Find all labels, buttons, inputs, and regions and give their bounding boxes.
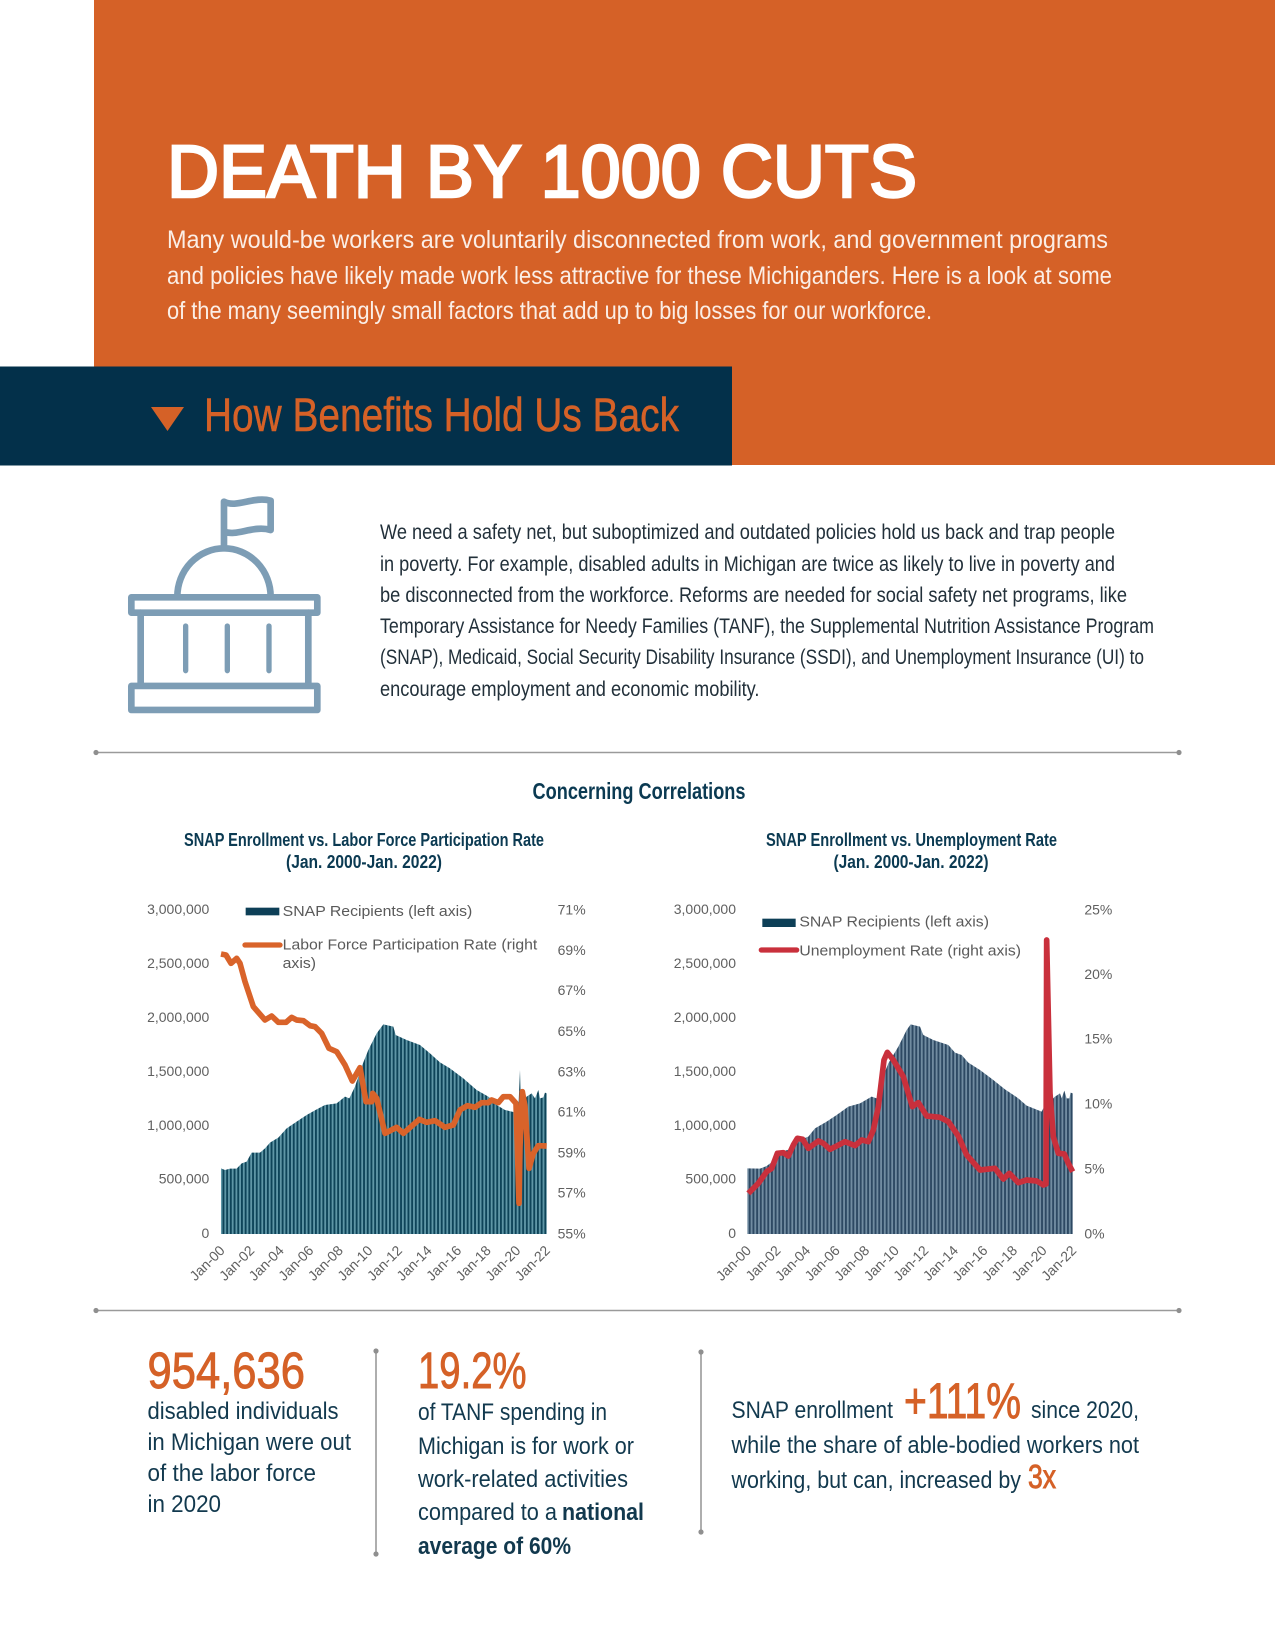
left axis labels bbox=[147, 901, 210, 1241]
stat text: of TANF spending in bbox=[418, 1399, 607, 1426]
chart title: left: SNAP Enrollment vs. Labor Force Participation Rate bbox=[184, 829, 544, 850]
section heading band bbox=[0, 366, 732, 466]
header intro text: Many would-be workers are voluntarily disconnected from work, and government programs bbox=[167, 226, 1108, 254]
intro paragraph: be disconnected from the workforce. Reforms are needed for social safety net programs, like bbox=[380, 584, 1127, 607]
x axis labels: Jan-18 bbox=[979, 1242, 1020, 1284]
right axis labels: 5% bbox=[1084, 1160, 1105, 1176]
right axis labels: 0% bbox=[1084, 1225, 1105, 1241]
x axis labels: Jan-02 bbox=[216, 1242, 258, 1284]
intro paragraph bbox=[380, 521, 1154, 701]
stat text: average of 60% bbox=[418, 1533, 571, 1560]
stat text: Michigan is for work or bbox=[418, 1433, 634, 1460]
bars: SNAP recipients bbox=[747, 1024, 1073, 1234]
stat: SNAP enrollment: since 2020, bbox=[1031, 1397, 1139, 1424]
chart title: right bbox=[766, 829, 1057, 872]
x axis labels: Jan-06 bbox=[275, 1242, 317, 1284]
stat: SNAP enrollment: while the share of able-bodied workers not bbox=[731, 1432, 1139, 1459]
right axis labels: 69% bbox=[558, 942, 586, 958]
x axis labels: Jan-10 bbox=[860, 1242, 902, 1284]
legend: SNAP Recipients (left axis) bbox=[283, 903, 472, 920]
stat number: 3x: 3x bbox=[1028, 1458, 1056, 1495]
stat number: +111%: +111% bbox=[904, 1373, 1021, 1429]
x axis labels: Jan-10 bbox=[334, 1242, 376, 1284]
x axis labels: Jan-02 bbox=[742, 1242, 784, 1284]
stat text: in Michigan were out bbox=[148, 1429, 351, 1456]
right axis labels: 25% bbox=[1084, 901, 1112, 917]
bars: SNAP recipients bbox=[221, 1024, 547, 1234]
right axis labels: 57% bbox=[558, 1185, 586, 1201]
left axis labels: 2,000,000 bbox=[147, 1009, 210, 1025]
title: DEATH BY 1000 CUTS bbox=[167, 130, 917, 213]
legend: axis) bbox=[283, 955, 316, 972]
legend bbox=[245, 903, 538, 972]
legend: Labor Force Participation Rate (right bbox=[283, 936, 538, 953]
stat text bbox=[417, 1399, 644, 1560]
x axis labels bbox=[713, 1242, 1080, 1284]
stat: SNAP enrollment: SNAP enrollment bbox=[732, 1397, 893, 1424]
left axis labels: 1,000,000 bbox=[674, 1117, 736, 1133]
right axis labels: 65% bbox=[558, 1023, 586, 1039]
x axis labels: Jan-22 bbox=[511, 1242, 553, 1284]
left axis labels: 1,500,000 bbox=[674, 1063, 736, 1079]
legend bbox=[761, 914, 1021, 959]
x axis labels: Jan-22 bbox=[1038, 1242, 1080, 1284]
right axis labels: 63% bbox=[558, 1064, 586, 1080]
x axis labels: Jan-14 bbox=[393, 1242, 435, 1284]
left axis labels: 0 bbox=[728, 1225, 736, 1241]
charts heading: Concerning Correlations bbox=[532, 778, 746, 804]
header intro text: and policies have likely made work less attractive for these Michiganders. Here is a look at some bbox=[167, 262, 1112, 290]
left axis labels: 1,000,000 bbox=[147, 1117, 210, 1133]
left axis labels: 500,000 bbox=[685, 1171, 736, 1187]
header: orange banner bbox=[94, 0, 1275, 465]
right axis labels: 61% bbox=[558, 1104, 586, 1120]
right axis labels: 59% bbox=[558, 1144, 586, 1160]
left axis labels: 2,000,000 bbox=[674, 1009, 736, 1025]
x axis labels: Jan-04 bbox=[772, 1242, 813, 1284]
x axis labels: Jan-00 bbox=[713, 1242, 754, 1284]
right axis labels: 10% bbox=[1084, 1096, 1112, 1112]
chart title: right: (Jan. 2000-Jan. 2022) bbox=[834, 851, 988, 872]
left axis labels: 2,500,000 bbox=[674, 955, 736, 971]
stat: SNAP enrollment: working, but can, increased by bbox=[731, 1467, 1021, 1494]
x axis labels: Jan-00 bbox=[186, 1242, 228, 1284]
left axis labels: 500,000 bbox=[159, 1171, 210, 1187]
left axis labels bbox=[674, 901, 736, 1241]
icon: capitol building bbox=[131, 500, 317, 710]
right axis labels bbox=[1084, 901, 1112, 1241]
right axis labels: 20% bbox=[1084, 966, 1112, 982]
left axis labels: 2,500,000 bbox=[147, 955, 210, 971]
x axis labels: Jan-08 bbox=[304, 1242, 346, 1284]
right axis labels: 15% bbox=[1084, 1031, 1112, 1047]
legend: SNAP Recipients (left axis) bbox=[799, 914, 989, 931]
left axis labels: 3,000,000 bbox=[147, 901, 210, 917]
stat number: 954,636 bbox=[148, 1342, 305, 1399]
line: unemployment rate bbox=[748, 940, 1073, 1193]
intro paragraph: Temporary Assistance for Needy Families (TANF), the Supplemental Nutrition Assistance Program bbox=[380, 615, 1154, 638]
right axis labels: 55% bbox=[558, 1225, 586, 1241]
chart title: left bbox=[184, 829, 544, 872]
stat text: of the labor force bbox=[148, 1460, 316, 1487]
right axis labels: 71% bbox=[558, 901, 586, 917]
intro paragraph: in poverty. For example, disabled adults in Michigan are twice as likely to live in poverty and bbox=[380, 553, 1115, 576]
x axis labels bbox=[186, 1242, 553, 1284]
stat: SNAP enrollment bbox=[731, 1373, 1139, 1495]
chart title: left: (Jan. 2000-Jan. 2022) bbox=[286, 851, 442, 872]
x axis labels: Jan-12 bbox=[890, 1242, 932, 1284]
chart: SNAP vs unemployment bbox=[674, 901, 1112, 1284]
stat text: in 2020 bbox=[148, 1491, 221, 1518]
right axis labels: 67% bbox=[558, 982, 586, 998]
left axis labels: 3,000,000 bbox=[674, 901, 736, 917]
x axis labels: Jan-20 bbox=[1008, 1242, 1050, 1284]
intro paragraph: We need a safety net, but suboptimized and outdated policies hold us back and trap people bbox=[380, 521, 1115, 544]
x axis labels: Jan-04 bbox=[245, 1242, 287, 1284]
right axis labels bbox=[558, 901, 586, 1241]
icon: down triangle bbox=[151, 407, 184, 431]
x axis labels: Jan-16 bbox=[949, 1242, 991, 1284]
chart: SNAP vs labor force participation bbox=[147, 901, 586, 1284]
stat: TANF spending bbox=[417, 1342, 644, 1560]
x axis labels: Jan-20 bbox=[482, 1242, 524, 1284]
x axis labels: Jan-16 bbox=[423, 1242, 464, 1284]
stat: disabled individuals bbox=[148, 1342, 351, 1518]
stat text: national bbox=[562, 1499, 644, 1526]
x axis labels: Jan-06 bbox=[801, 1242, 843, 1284]
header intro text bbox=[167, 226, 1112, 325]
legend: Unemployment Rate (right axis) bbox=[799, 942, 1021, 959]
stat text bbox=[148, 1398, 351, 1518]
stat text: compared to a bbox=[418, 1499, 558, 1526]
line: labor force participation bbox=[221, 954, 547, 1203]
chart title: right: SNAP Enrollment vs. Unemployment Rate bbox=[766, 829, 1057, 850]
header intro text: of the many seemingly small factors that add up to big losses for our workforce. bbox=[167, 297, 932, 325]
left axis labels: 1,500,000 bbox=[147, 1063, 210, 1079]
x axis labels: Jan-18 bbox=[452, 1242, 494, 1284]
x axis labels: Jan-08 bbox=[831, 1242, 873, 1284]
section heading: How Benefits Hold Us Back bbox=[204, 388, 679, 441]
stat text: disabled individuals bbox=[148, 1398, 338, 1425]
stat number: 19.2% bbox=[418, 1342, 526, 1399]
x axis labels: Jan-14 bbox=[920, 1242, 961, 1284]
intro paragraph: encourage employment and economic mobility. bbox=[380, 678, 760, 701]
stat text: work-related activities bbox=[417, 1466, 628, 1493]
left axis labels: 0 bbox=[202, 1225, 210, 1241]
x axis labels: Jan-12 bbox=[364, 1242, 405, 1284]
